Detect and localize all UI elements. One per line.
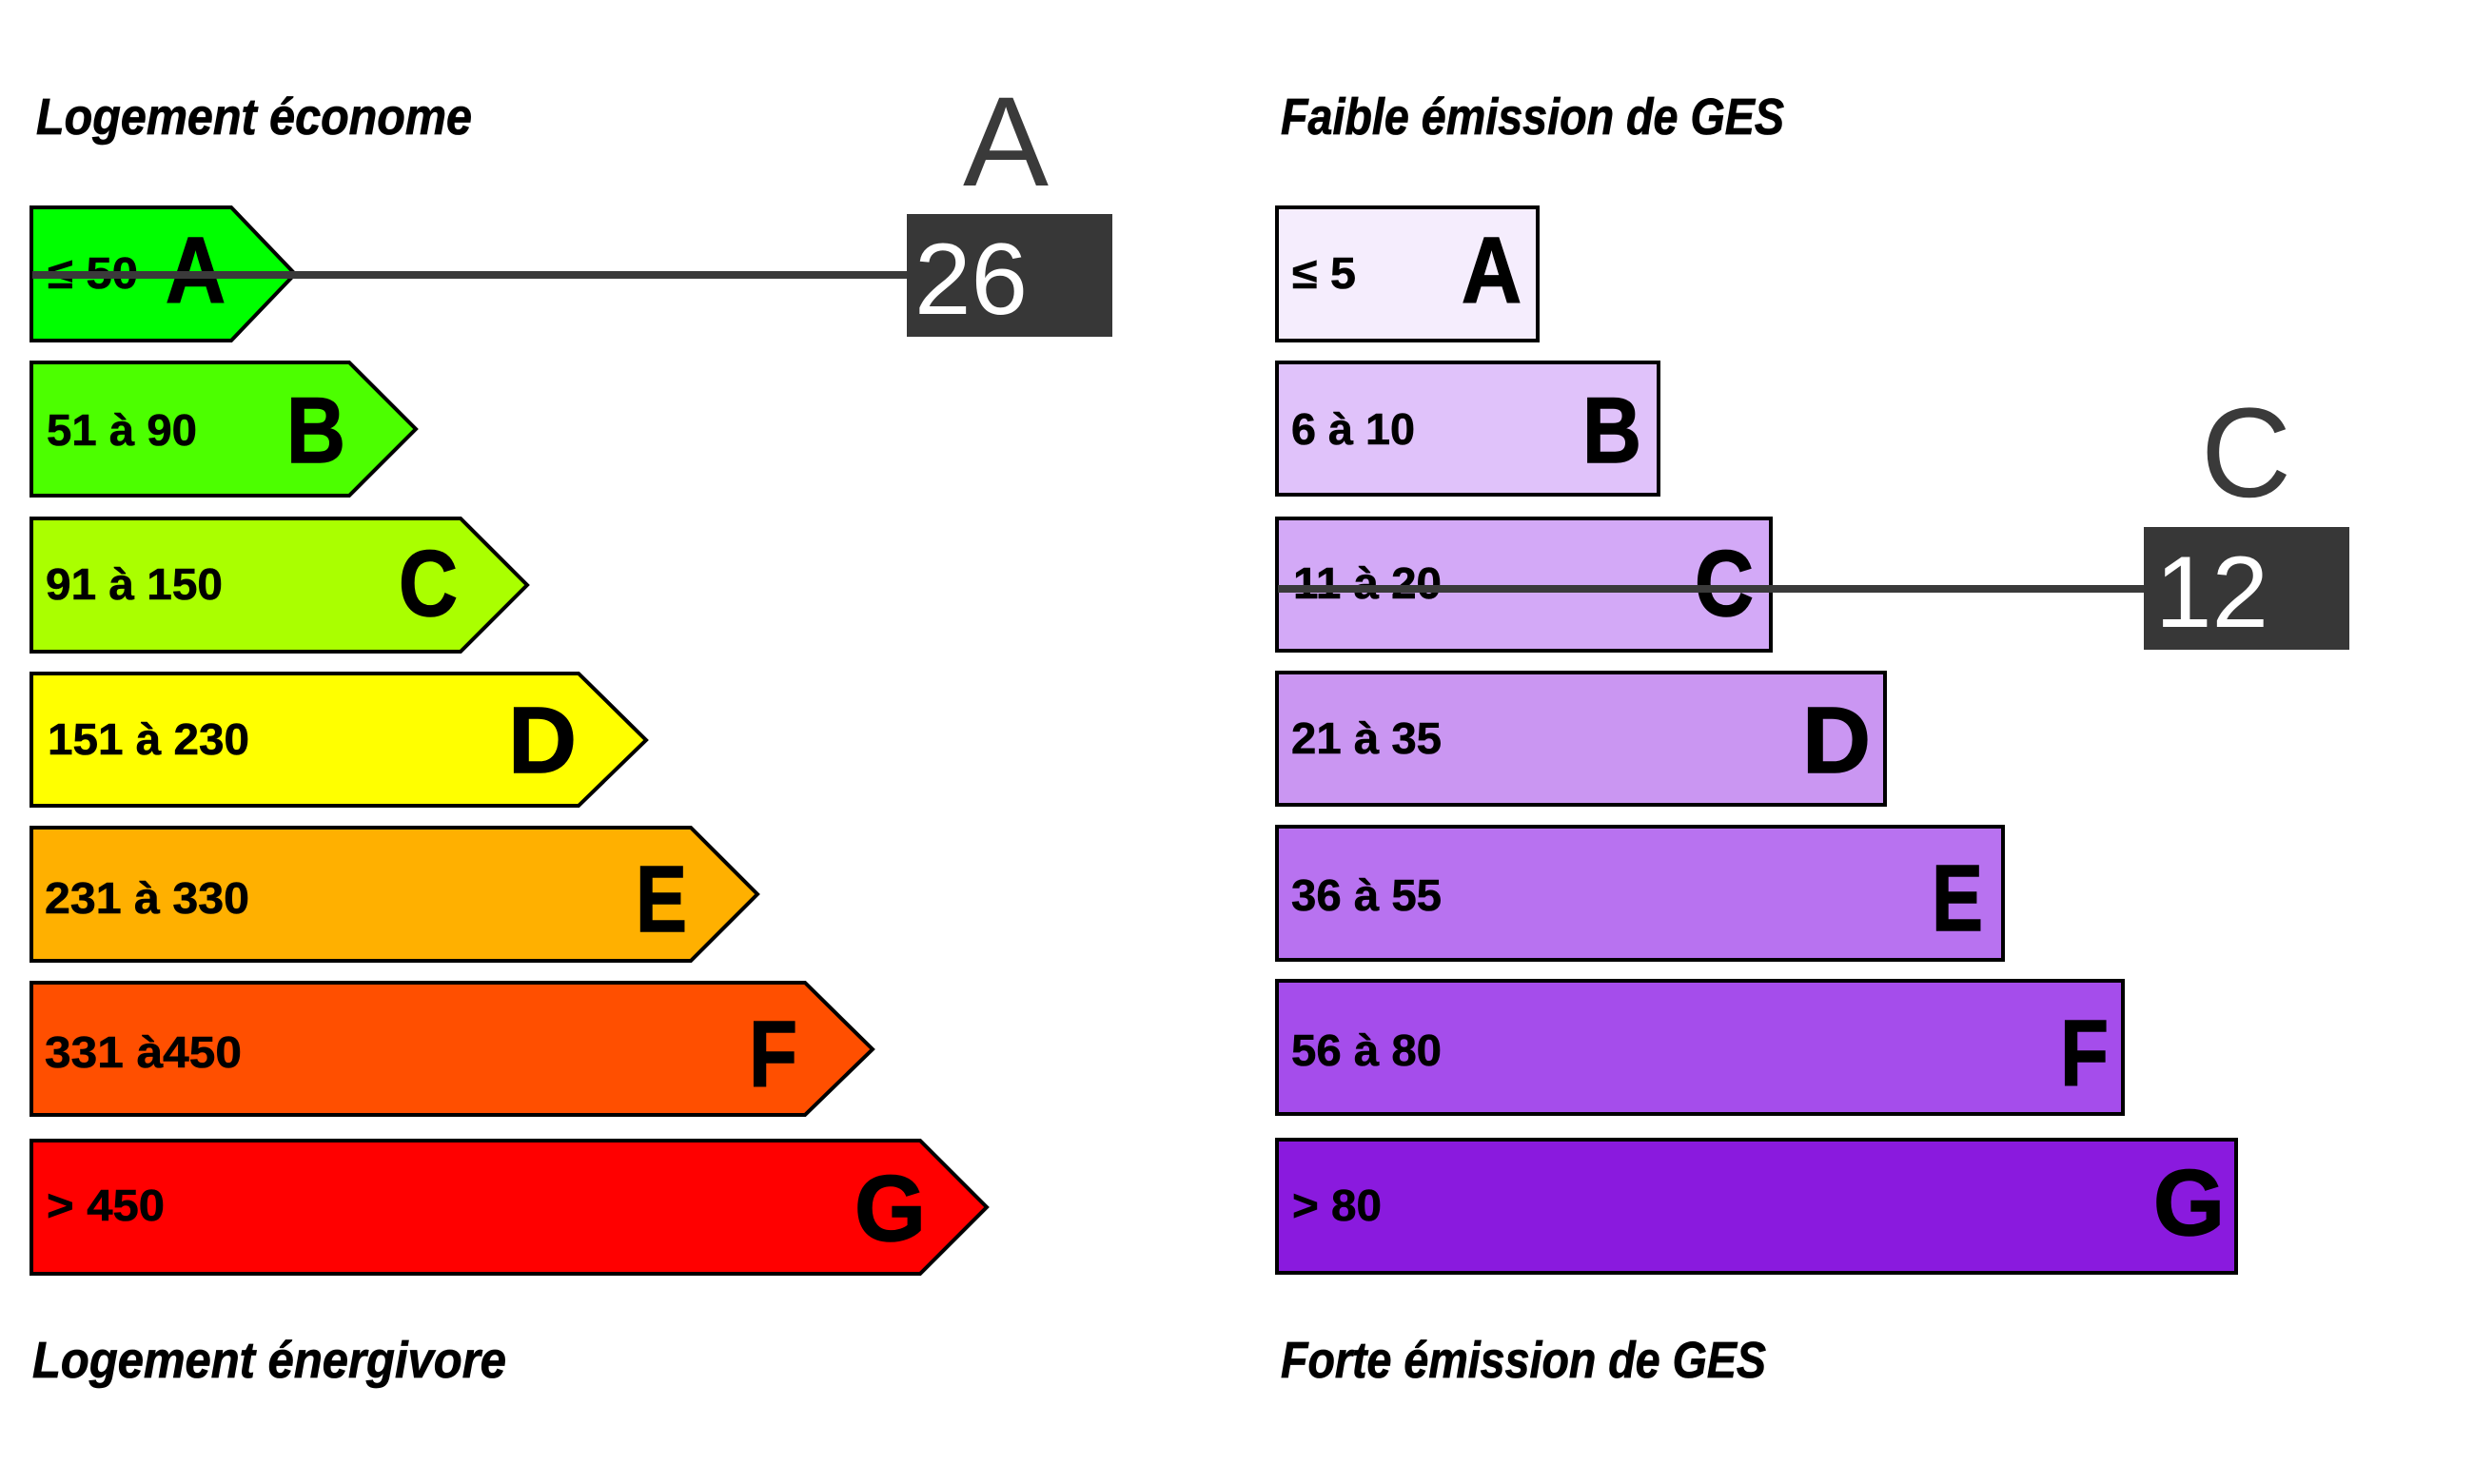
GES row C [1277,518,1771,651]
GES row F [1277,981,2123,1114]
GES row C: 11 à 20 [1293,558,1442,608]
heading: bottom GES: Forte émission de GES [1281,1332,1766,1389]
GES row D [1277,673,1885,805]
heading: bottom energy: Logement énergivore [32,1332,506,1389]
GES row B [1277,362,1659,495]
energy row B [31,362,416,496]
panel: energy consumption scale [31,71,1112,1389]
callout: GES result: 12 [2155,535,2268,649]
GES row E [1277,827,2003,960]
energy row A: ≤ 50 [48,248,138,298]
GES row A [1277,207,1538,341]
GES row D: 21 à 35 [1291,713,1442,763]
energy row E [31,828,757,961]
energy row E: E [636,847,687,951]
energy row D [31,674,646,806]
energy row B: 51 à 90 [47,405,197,455]
callout: energy result [32,71,1112,337]
energy row G: G [854,1156,926,1260]
GES row B: 6 à 10 [1291,404,1415,454]
heading: top GES: Faible émission de GES [1281,88,1784,146]
energy row C: 91 à 150 [46,559,223,609]
GES row G [1277,1140,2236,1273]
callout: GES result: C [2201,382,2291,524]
energy row D: 151 à 230 [48,714,249,764]
energy row C: C [399,531,458,635]
energy row E: 231 à 330 [45,873,249,923]
GES row A: ≤ 5 [1292,248,1356,298]
energy row A [31,207,295,341]
GES row G: > 80 [1292,1181,1382,1230]
callout: GES result [1278,382,2349,650]
energy row F: F [749,1002,797,1106]
energy row F [31,983,873,1115]
GES row A: A [1462,218,1522,322]
heading: top energy: Logement économe [36,88,472,146]
energy row D: D [508,688,577,792]
GES row E: 36 à 55 [1291,870,1442,920]
energy row G [31,1141,987,1274]
callout: energy result: A [963,71,1050,213]
energy row F: 331 à450 [45,1027,242,1077]
GES row F: F [2060,1001,2109,1105]
GES row D: D [1802,688,1871,792]
energy row B: B [286,378,345,482]
panel: greenhouse gas emission scale [1277,88,2349,1389]
GES row B: B [1582,378,1641,482]
energy row A: A [166,218,226,322]
GES row C: C [1695,531,1754,635]
GES row E: E [1932,846,1983,950]
GES row G: G [2153,1150,2225,1255]
GES row F: 56 à 80 [1291,1025,1442,1075]
energy row G: > 450 [47,1181,165,1230]
callout: energy result: 26 [914,222,1028,336]
energy row C [31,518,527,652]
